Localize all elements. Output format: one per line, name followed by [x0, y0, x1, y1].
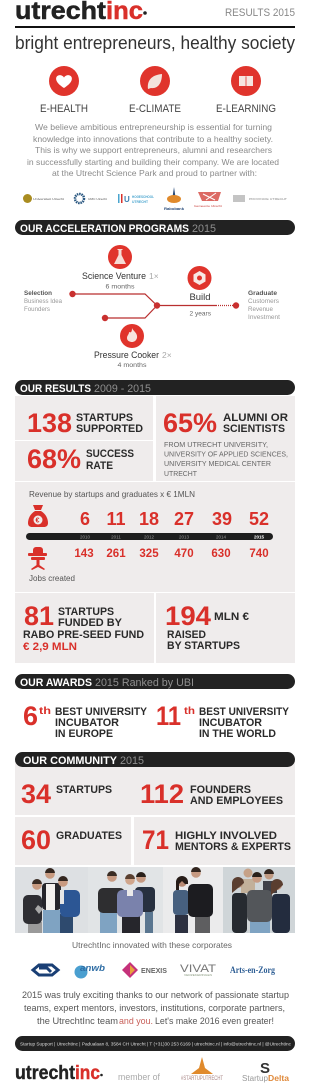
logo: hogeschool utrecht: U — [124, 195, 130, 204]
graduate text: Investment — [248, 314, 280, 321]
photo group four — [232, 868, 290, 933]
stat: rabo fund: STARTUPS — [58, 606, 114, 618]
stat: startups supported: STARTUPS — [76, 412, 133, 424]
stat: 112 founders: 112 — [140, 779, 184, 809]
heading: awards: OUR AWARDS — [20, 677, 92, 689]
stat: alumni or scientists: FROM UTRECHT UNIVERSITY, — [164, 440, 268, 449]
stat: 71 mentors: 71 — [142, 825, 169, 855]
icon: build nut — [188, 266, 212, 290]
heading: community: 2015 — [120, 755, 144, 767]
stat: alumni or scientists: UNIVERSITY OF APPLIED SCIENCES, — [164, 450, 288, 458]
logo: gemeente utrecht — [194, 192, 222, 208]
timeline bar with years: 2013 — [179, 534, 190, 540]
stat: 71 mentors: HIGHLY INVOLVED — [175, 830, 277, 842]
stat: 71 mentors — [142, 825, 291, 855]
revenue values: 6 — [80, 509, 90, 529]
stat: startups supported: SUPPORTED — [76, 423, 143, 435]
science venture label: 6 months — [106, 284, 135, 290]
logo: vivat: VERZEKERINGEN — [184, 973, 212, 977]
stat: raised: BY STARTUPS — [167, 640, 240, 652]
logo: enexis: ENEXIS — [141, 966, 167, 975]
selection text: Selection — [24, 290, 52, 297]
intro paragraph: We believe ambitious entrepreneurship is essential for turning — [35, 122, 272, 132]
science venture label: 1× — [149, 271, 159, 281]
stat: rabo fund: RABO PRE-SEED FUND — [23, 629, 144, 641]
jobs values: 470 — [174, 548, 194, 560]
selection text: Founders — [24, 306, 51, 313]
closing message: 2015 was truly exciting thanks to our network of passionate startup — [22, 990, 289, 1001]
stat: raised: MLN € — [214, 611, 249, 623]
graduate text: Graduate — [248, 290, 277, 297]
stat: 112 founders: FOUNDERS — [190, 784, 251, 796]
timeline bar with years: 2015 — [254, 534, 265, 540]
closing message: teams, expert mentors, investors, institutions, corporate partners, — [24, 1003, 285, 1014]
stat: success rate — [27, 444, 134, 474]
community panel backgrounds — [15, 760, 295, 865]
corporate logos — [33, 962, 275, 978]
award: 6th europe: IN EUROPE — [55, 728, 113, 740]
stat: 34 startups: STARTUPS — [56, 784, 112, 796]
graduate text: Revenue — [248, 306, 273, 313]
photo group three — [173, 867, 213, 933]
award: 6th europe: BEST UNIVERSITY — [55, 706, 148, 718]
stat: 60 graduates: GRADUATES — [56, 830, 122, 842]
heading: acceleration programs: OUR ACCELERATION PROGRAMS — [20, 223, 189, 235]
icon: leaf — [140, 66, 170, 96]
jobs values — [74, 548, 269, 560]
heading: awards — [15, 674, 295, 689]
build label — [190, 292, 212, 318]
logo: enexis — [122, 962, 167, 978]
jobs values: 740 — [249, 548, 269, 560]
timeline bar with years: 2010 — [80, 534, 91, 540]
revenue caption: Revenue by startups and graduates x € 1MLN — [29, 490, 195, 499]
stat: success rate: SUCCESS — [86, 448, 134, 460]
award: 6th europe: 6 — [23, 701, 38, 731]
timeline bar with years: 2011 — [111, 534, 121, 540]
award: 6th europe: INCUBATOR — [55, 717, 119, 729]
logo: startupdelta: Delta — [268, 1074, 290, 1083]
science venture label — [82, 271, 159, 290]
stat: alumni or scientists: 65% — [163, 408, 217, 438]
build label: 2 years — [190, 310, 212, 318]
pressure cooker label: 4 months — [118, 362, 147, 369]
logo: hogeschool utrecht: HOGESCHOOL — [132, 195, 154, 199]
logo: universiteit utrecht: Universiteit Utrecht — [33, 197, 64, 201]
logo: umc utrecht: UMC Utrecht — [88, 197, 107, 201]
label: e-climate: E-CLIMATE — [129, 103, 181, 115]
footer contact bar: Startup Support | UtrechtInc | Padualaan 8, 3584 CH Utrecht | T (+31)30 253 6169 | utrechtinc.nl | info@utrechtinc.nl | @UtrechtInc — [20, 1042, 292, 1046]
header logo — [15, 0, 147, 25]
logo: hogeschool utrecht — [118, 194, 154, 204]
logo: arts en zorg: Arts-en-Zorg — [230, 965, 275, 975]
heading: results: 2009 - 2015 — [94, 383, 151, 395]
logo: hogeschool utrecht: UTRECHT — [132, 200, 148, 204]
jobs values: 143 — [74, 548, 94, 560]
stat: startups supported: 138 — [27, 408, 72, 438]
pressure cooker label — [94, 350, 172, 369]
stat: 34 startups — [21, 779, 112, 809]
footer contact bar — [15, 1036, 295, 1051]
award: 6th europe: th — [39, 705, 51, 717]
logo: vivat: VIVAT — [180, 963, 216, 975]
closing message — [22, 990, 289, 1027]
stat: raised: 194 — [165, 601, 211, 631]
stat: startups supported — [27, 408, 143, 438]
stat: rabo fund — [23, 601, 144, 653]
logo: startup utrecht: #STARTUPUTRECHT — [181, 1076, 223, 1082]
photo group two — [98, 871, 155, 933]
heading: community: OUR COMMUNITY — [23, 755, 118, 767]
award: 11th world: IN THE WORLD — [199, 728, 276, 740]
stat: 60 graduates: 60 — [21, 825, 51, 855]
revenue values: 52 — [249, 509, 269, 529]
tagline: bright entrepreneurs, healthy society — [15, 33, 295, 53]
revenue values: 18 — [139, 509, 159, 529]
intro paragraph: This is why we support entrepreneurs, alumni and researchers — [35, 145, 272, 155]
intro paragraph: at the Utrecht Science Park and proud to partner with: — [52, 168, 257, 178]
logo: anwb — [74, 963, 106, 978]
jobs values: 261 — [106, 548, 126, 560]
photo group one — [23, 868, 80, 933]
graduate text: Customers — [248, 298, 280, 305]
icon: flask — [108, 245, 132, 269]
results panel backgrounds — [15, 396, 295, 663]
stat: rabo fund: FUNDED BY — [58, 617, 123, 629]
results year label: RESULTS 2015 — [225, 7, 295, 19]
pressure cooker label: Pressure Cooker — [94, 350, 159, 360]
intro paragraph: knowledge into innovations that contribute to a healthy society. — [33, 134, 273, 144]
revenue values: 27 — [174, 509, 194, 529]
stat: rabo fund: 81 — [24, 601, 54, 631]
logo: startupdelta: Startup — [242, 1074, 269, 1083]
heading: community — [15, 752, 295, 767]
flow nodes — [69, 291, 239, 321]
revenue values: 11 — [106, 509, 126, 529]
science venture label: Science Venture — [82, 271, 146, 281]
stat: alumni or scientists: SCIENTISTS — [223, 423, 285, 435]
heading: awards: 2015 Ranked by UBI — [95, 677, 194, 689]
logo: provincie utrecht — [233, 195, 287, 202]
heading: results — [15, 380, 295, 395]
stat: alumni or scientists: ALUMNI OR — [223, 412, 288, 424]
intro paragraph: in successfully starting and building their company. We are located — [27, 157, 279, 167]
jobs caption: Jobs created — [29, 574, 75, 583]
closing message: Let's make 2016 even greater! — [155, 1016, 274, 1027]
stat: 60 graduates — [21, 825, 122, 855]
stat: alumni or scientists: UNIVERSITY MEDICAL CENTER — [164, 459, 272, 468]
logo: provincie utrecht: PROVINCIE UTRECHT — [249, 197, 287, 201]
build label: Build — [190, 292, 210, 302]
label: e-health: E-HEALTH — [40, 103, 88, 115]
icon: book — [231, 66, 261, 96]
heading: acceleration programs — [15, 220, 295, 235]
stat: 112 founders: AND EMPLOYEES — [190, 795, 283, 807]
award: 11th world: INCUBATOR — [199, 717, 262, 729]
partner logos — [23, 187, 287, 211]
heading: acceleration programs: 2015 — [192, 223, 216, 235]
logo: ns — [33, 965, 58, 975]
logo: startupdelta: S — [260, 1060, 270, 1077]
icon: money bag: € — [36, 518, 40, 524]
stat: success rate: RATE — [86, 460, 113, 472]
stat: alumni or scientists — [163, 408, 288, 478]
stat: raised: RAISED — [167, 629, 206, 641]
logo: gemeente utrecht: Gemeente Utrecht — [194, 204, 222, 208]
intro paragraph — [27, 122, 279, 178]
heading: results: OUR RESULTS — [20, 383, 91, 395]
logo: rabobank: Rabobank — [164, 207, 184, 211]
closing message: the UtrechtInc team — [37, 1016, 118, 1027]
team photo — [15, 867, 295, 933]
focus areas — [40, 66, 276, 115]
selection text — [24, 290, 62, 313]
timeline bar with years: 2012 — [144, 534, 155, 540]
flow lines — [72, 294, 235, 318]
logo: startup utrecht — [181, 1057, 223, 1082]
stat: 112 founders — [140, 779, 283, 809]
stat: success rate: 68% — [27, 444, 81, 474]
logo: startupdelta — [242, 1060, 290, 1083]
label: e-learning: E-LEARNING — [216, 103, 276, 115]
jobs values: 630 — [211, 548, 231, 560]
pressure cooker label: 2× — [162, 350, 172, 360]
award: 6th europe — [23, 701, 148, 740]
award: 11th world — [156, 701, 290, 740]
logo: rabobank — [164, 187, 184, 211]
timeline bar with years: 2014 — [216, 534, 227, 540]
graduate text — [248, 290, 280, 321]
logo: universiteit utrecht — [23, 194, 64, 203]
selection text: Business Idea — [24, 298, 62, 305]
award: 11th world: BEST UNIVERSITY — [199, 706, 290, 718]
icon: flame — [120, 324, 144, 348]
stat: rabo fund: € 2,9 MLN — [23, 641, 77, 653]
stat: 71 mentors: MENTORS & EXPERTS — [175, 841, 291, 853]
stat: alumni or scientists: UTRECHT — [164, 469, 197, 478]
award: 11th world: 11 — [156, 701, 181, 731]
logo: umc utrecht — [75, 194, 107, 203]
stat: 34 startups: 34 — [21, 779, 51, 809]
icon: heart — [49, 66, 79, 96]
logo: anwb: anwb — [80, 963, 106, 973]
revenue values: 39 — [212, 509, 232, 529]
award: 11th world: th — [184, 705, 195, 717]
timeline bar with years — [26, 533, 273, 540]
closing message: and you. — [119, 1016, 153, 1027]
member of text: member of — [118, 1072, 160, 1082]
footer logo: inc — [75, 1063, 100, 1084]
corporates caption: UtrechtInc innovated with these corporates — [72, 940, 232, 950]
stat: raised — [165, 601, 249, 652]
footer logo: utrecht — [15, 1063, 76, 1084]
icon: money bag — [28, 505, 48, 527]
program flow diagram — [24, 245, 280, 369]
jobs values: 325 — [139, 548, 159, 560]
icon: office chair — [28, 547, 47, 570]
revenue chart — [26, 490, 273, 583]
revenue values — [80, 509, 269, 529]
